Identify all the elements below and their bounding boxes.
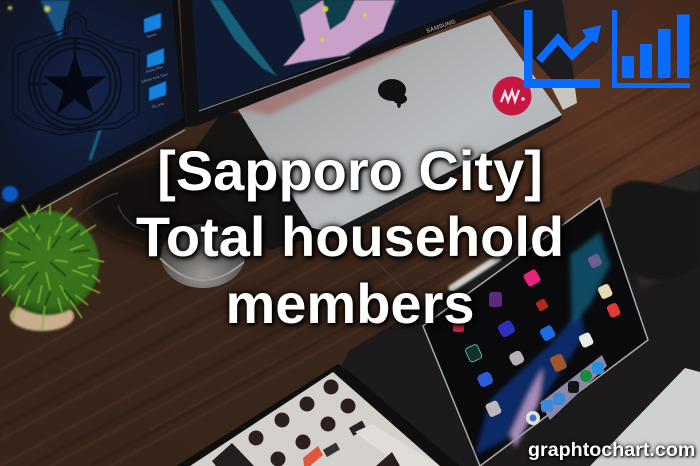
potted plant xyxy=(0,204,104,331)
shadow area under monitors xyxy=(85,157,315,253)
watermark: graphtochart.com xyxy=(528,439,695,461)
knobs xyxy=(248,380,356,466)
dark desk mat xyxy=(300,165,700,466)
controller keys xyxy=(355,424,440,466)
cables xyxy=(75,193,412,300)
left monitor: cfg_proj xyxy=(151,101,164,109)
tablet app icons xyxy=(453,253,621,418)
title: members xyxy=(225,272,475,335)
left monitor: Adobe After xyxy=(145,65,165,74)
white laptop corner xyxy=(590,368,700,466)
icon: bar chart xyxy=(612,10,690,88)
stylus pencil xyxy=(452,258,498,288)
red button xyxy=(303,446,323,466)
laptop xyxy=(237,15,562,240)
title: Total household xyxy=(136,205,564,268)
MIDI controller xyxy=(176,364,460,466)
title: [Sapporo City] xyxy=(157,139,543,202)
tablet xyxy=(423,198,648,466)
black speaker blob xyxy=(608,181,700,280)
left monitor xyxy=(0,0,186,232)
icon: line chart xyxy=(524,10,601,88)
tablet wallpaper xyxy=(475,232,610,455)
screen xyxy=(212,443,254,466)
stand behind phone and dock xyxy=(490,0,574,80)
red sticker xyxy=(492,76,532,116)
star logo xyxy=(13,12,139,135)
right monitor xyxy=(180,0,517,127)
round speaker on desk xyxy=(160,224,245,288)
desktop folder icons xyxy=(144,13,166,101)
left monitor: Assets xyxy=(146,32,158,39)
tablet dock xyxy=(540,355,607,420)
apple logo xyxy=(378,79,407,108)
title xyxy=(134,139,567,335)
left monitor: Effects Auto Save xyxy=(141,72,169,84)
monitor stand xyxy=(180,112,330,250)
monitor brand: SAMSUNG xyxy=(426,19,457,35)
